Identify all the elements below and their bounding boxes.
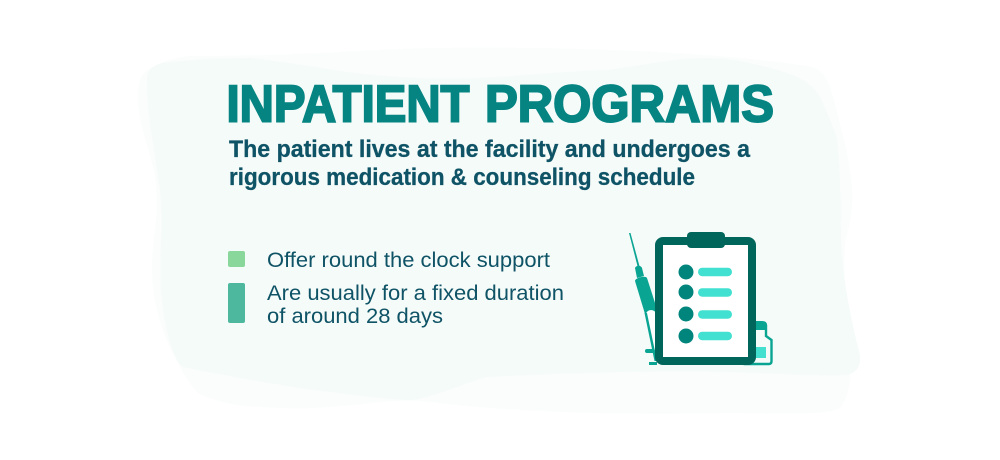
- subtitle: rigorous medication & counseling schedule: [229, 164, 695, 191]
- icon: clipboard board: [659, 241, 752, 361]
- bullet list: [228, 248, 564, 328]
- title: [226, 76, 774, 134]
- icon: checklist: [678, 264, 732, 344]
- bullet text: fixed duration: of around 28 days: [267, 304, 443, 328]
- subtitle: [229, 136, 750, 191]
- icon: vial: [745, 321, 772, 364]
- title: INPATIENT: [226, 76, 470, 134]
- bullet text: round the clock: Offer round the clock support: [267, 248, 550, 272]
- icon: clipboard with syringe and vial: [629, 232, 772, 365]
- bullet text: fixed duration: Are usually for a fixed duration: [267, 281, 564, 305]
- title: PROGRAMS: [485, 76, 774, 134]
- background blob: inner wash: [147, 58, 860, 400]
- icon: clipboard clip: [687, 232, 725, 248]
- background blob: outer wash: [138, 48, 852, 414]
- icon: syringe: [629, 233, 657, 365]
- bullet marker: teal: [228, 283, 245, 323]
- subtitle: The patient lives at the facility and undergoes a: [229, 136, 750, 163]
- bullet marker: light green: [228, 251, 245, 267]
- bullet text: fixed duration: [267, 281, 564, 328]
